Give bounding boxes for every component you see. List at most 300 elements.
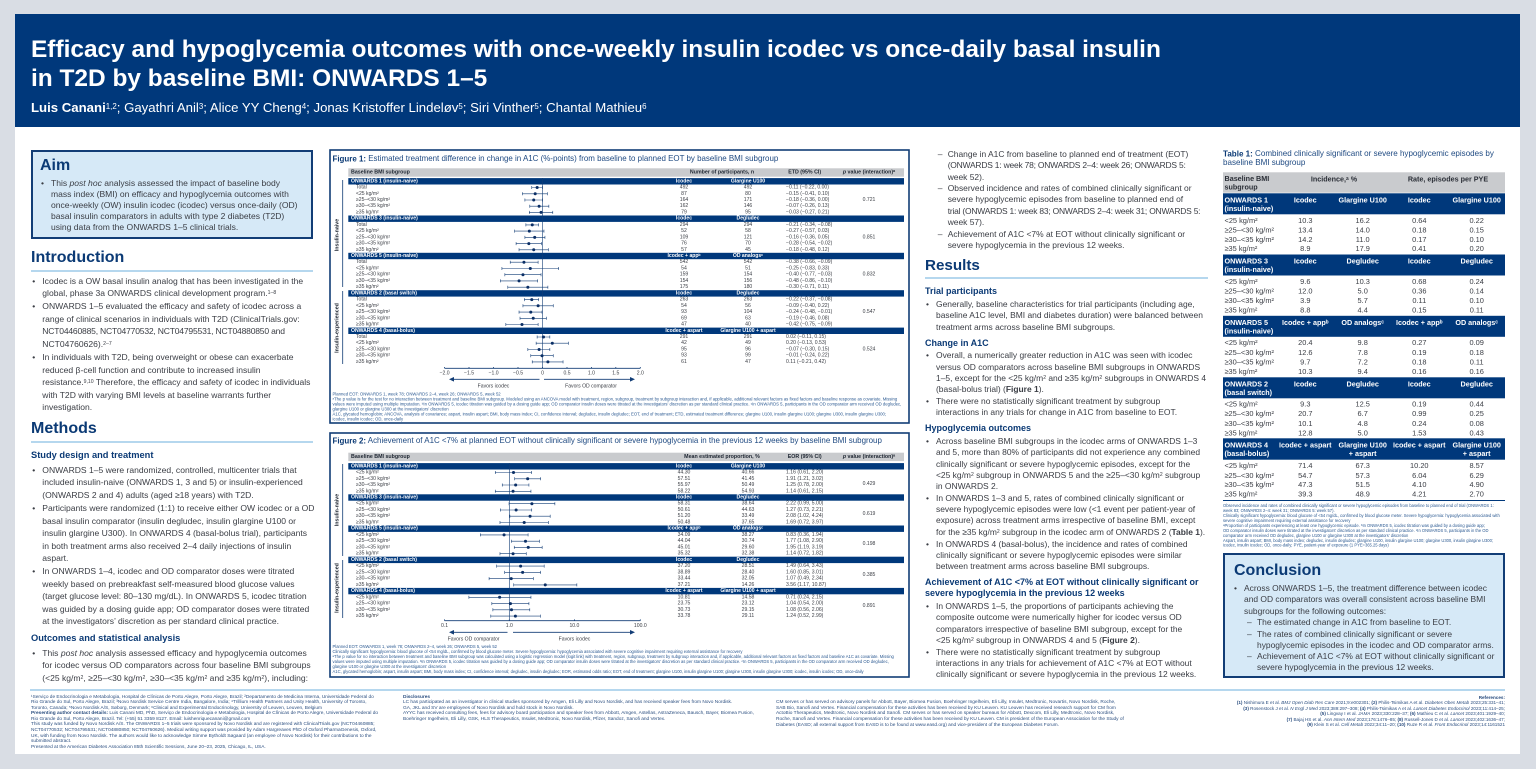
text: study design bullets: included insulin-naive (ONWARDS 1, 3 and 5) or insulin-experienced	[42, 477, 303, 487]
figure 1 footnotes: A1C, glycated hemoglobin; ANCOVA, analysis of covariance; aspart, insulin aspart; BMI, body mass index; CI, confidence interval; degludec, insulin degludec; EOT, end of treatment; ETD, estimated treatment difference; glargine U100, insulin glargine U100; glargine U300, insulin glargine U300;	[332, 412, 886, 416]
ONWARDS 5 block: 0.16	[1412, 367, 1426, 376]
ONWARDS 2 block: 5.0	[1358, 428, 1368, 437]
ONWARDS 4 rows: ≥30–<35 kg/m²	[356, 353, 390, 359]
ONWARDS 4 rows: 1.24 (0.52, 2.99)	[786, 613, 824, 619]
ONWARDS 1 rows: 0.721	[863, 197, 876, 203]
ONWARDS 3 rows: ≥35 kg/m²	[356, 247, 379, 253]
group labels	[334, 464, 343, 618]
ONWARDS 2 block: 0.44	[1470, 400, 1484, 408]
ONWARDS 2 rows	[348, 290, 904, 328]
forest plot 2 markers	[469, 463, 577, 621]
ONWARDS 4 rows: 30.73	[678, 607, 691, 613]
footer: disclosures continued	[776, 700, 1124, 728]
ONWARDS 4 rows: 33.78	[678, 613, 691, 619]
ONWARDS 4 block: ≥30–<35 kg/m²	[1224, 480, 1274, 489]
heading: aim: Aim	[40, 157, 70, 174]
ONWARDS 2 rows: 37.21	[678, 582, 691, 588]
footer: affiliations: Toronto, Canada; ⁵Novo Nordisk A/S, Søborg, Denmark; ⁶Clinical and Experimental Endocrinology, University of Leuven, Leuven, Belgium	[31, 706, 322, 711]
ONWARDS 1 rows: 41.45	[742, 476, 755, 482]
ONWARDS 4 rows: 61	[681, 359, 687, 365]
ONWARDS 3 block: 0.11	[1412, 296, 1426, 305]
figure 2 table header	[348, 453, 904, 461]
ONWARDS 4 rows: 23.12	[742, 601, 755, 607]
ONWARDS 2 rows: −0.42 (−0.75, −0.09)	[786, 322, 833, 328]
ONWARDS 3 rows: ≥30–<35 kg/m²	[356, 513, 390, 519]
ONWARDS 5 block: 7.2	[1358, 358, 1368, 366]
ONWARDS 3 rows: 37.65	[742, 520, 755, 526]
text: trial participants bullet: Generally, baseline characteristics for trial participants (including age,	[936, 299, 1195, 309]
ONWARDS 1 rows: 50.49	[742, 482, 755, 488]
arrow: favors OD comparator: Favors OD comparator	[565, 384, 617, 390]
ONWARDS 1 rows: 1.91 (1.21, 3.02)	[786, 476, 824, 482]
ONWARDS 3 rows: 76	[681, 241, 687, 247]
ONWARDS 1 rows: ≥35 kg/m²	[356, 209, 379, 215]
ONWARDS 4 rows: 0.20 (−0.13, 0.53)	[786, 340, 827, 346]
text: achievement bullets: interactions in any trials for achievement of A1C <7% at EOT without	[936, 658, 1192, 668]
footer: affiliations: This study was funded by Novo Nordisk A/S. The ONWARDS 1–5 trials were sponsored by Novo Nordisk and are registered with ClinicalTrials.gov (NCT04460885;	[31, 722, 375, 727]
ONWARDS 3 rows: Icodec	[676, 216, 692, 222]
ONWARDS 2 rows: 14.26	[742, 582, 755, 588]
ONWARDS 1 rows	[348, 178, 904, 215]
text: study design bullets: In ONWARDS 1–4, icodec and OD comparator doses were titrated	[42, 566, 294, 576]
ONWARDS 1 rows: <25 kg/m²	[356, 191, 379, 197]
heading: methods: Methods	[31, 420, 97, 437]
ONWARDS 2 block: 4.8	[1358, 419, 1368, 428]
ONWARDS 3 block: 12.0	[1298, 286, 1312, 296]
figure 2 title: Figure 2: Achievement of A1C <7% at planned EOT without clinically significant or severe hypoglycemia in the previous 12 weeks by baseline BMI subgroup	[332, 436, 882, 445]
ONWARDS 1 block: 16.2	[1356, 216, 1370, 225]
figure 2 table header: Baseline BMI subgroup	[351, 454, 411, 460]
text: study design bullets: aspart.	[42, 553, 68, 563]
text: aim bullet: once-weekly (OW) insulin icodec (icodec) versus once-daily (OD)	[51, 200, 298, 210]
group labels: Insulin-experienced	[334, 563, 340, 613]
footer: affiliations: UK, with funding from Novo Nordisk. The authors would like to acknowledge Simme Bytholdt Søgaard (an employee of Novo Nordisk) for their contributions to the	[31, 734, 372, 739]
ONWARDS 5 rows: ≥30–<35 kg/m²	[356, 544, 390, 550]
ONWARDS 2 block: Icodec	[1294, 380, 1317, 388]
ONWARDS 1 rows: 40.66	[742, 470, 755, 476]
ONWARDS 4 rows: <25 kg/m²	[356, 594, 379, 600]
ONWARDS 1 rows: <25 kg/m²	[356, 470, 379, 476]
figure 2 footnotes: glargine U100 or glargine U300 at the investigators’ discretion	[332, 664, 447, 669]
ONWARDS 5 rows: 154	[680, 278, 688, 284]
ONWARDS 5 block	[1223, 316, 1505, 376]
ONWARDS 5 block: (insulin-naive)	[1224, 326, 1274, 336]
ONWARDS 4 rows: ≥25–<30 kg/m²	[356, 601, 390, 607]
ONWARDS 5 rows: ONWARDS 5 (insulin-naive)	[351, 253, 418, 259]
ONWARDS 3 rows: 38.64	[742, 501, 755, 507]
ONWARDS 5 rows: 542	[680, 259, 688, 265]
panel: figure 2	[329, 432, 910, 678]
ONWARDS 1 block: Icodec	[1408, 196, 1431, 204]
ONWARDS 1 block: 0.22	[1470, 216, 1484, 225]
ONWARDS 5 block: Icodec + appᵇ	[1396, 318, 1443, 327]
footer: references	[1237, 694, 1505, 727]
ONWARDS 4 rows: 23.75	[678, 601, 691, 607]
ONWARDS 4 block: 8.57	[1470, 461, 1484, 470]
ONWARDS 3 rows: −0.18 (−0.48, 0.12)	[786, 247, 830, 253]
table 1	[1223, 149, 1505, 548]
text: hypoglycemia outcomes bullets: exposure) across treatment arms irrespective of baseline BMI, except	[936, 515, 1195, 525]
ONWARDS 1 rows: 87	[681, 191, 687, 197]
ONWARDS 5 block: 12.6	[1298, 348, 1312, 357]
figure 1 x axis: 0.5	[563, 370, 571, 376]
ONWARDS 5 rows: Total	[356, 259, 367, 265]
ONWARDS 2 rows: 3.56 (1.17, 10.87)	[786, 582, 827, 588]
ONWARDS 3 rows: 294	[744, 222, 752, 228]
text: introduction bullets: investigation.	[42, 402, 92, 412]
ONWARDS 1 rows: 146	[744, 203, 752, 209]
ONWARDS 3 rows: −0.16 (−0.36, 0.05)	[786, 234, 830, 240]
ONWARDS 1 rows: ≥35 kg/m²	[356, 488, 379, 494]
footer: disclosures continued: Diabetes (EASD; all external support from EASD is to be found at www.easd.org) and vice-president of the European Diabetes Forum.	[776, 723, 1059, 728]
ONWARDS 3 rows: −0.28 (−0.54, −0.02)	[786, 241, 833, 247]
text: trial participants bullet: baseline A1C level, BMI and diabetes duration) were balanced between	[936, 310, 1203, 320]
table footnotes: icodec, insulin icodec; OD, once-daily; PYE, patient-year of exposure (1 PYE=365.25 days)	[1223, 543, 1389, 548]
ONWARDS 4 block: 51.5	[1356, 480, 1370, 489]
text: hypoglycemia outcomes bullets: clinically significant or severe hypoglycemic episodes, except for the	[936, 459, 1190, 469]
forest plot 1 markers	[500, 178, 568, 368]
ONWARDS 2 rows: −0.24 (−0.48, −0.01)	[786, 309, 833, 315]
ONWARDS 3 rows: 70	[745, 241, 751, 247]
ONWARDS 2 rows: ≥35 kg/m²	[356, 322, 379, 328]
ONWARDS 3 block: Icodec	[1294, 257, 1317, 266]
ONWARDS 3 block: <25 kg/m²	[1224, 277, 1258, 286]
figure 2 footnotes: A1C, glycated hemoglobin; aspart, insulin aspart; BMI, body mass index; CI, confidence interval; degludec, insulin degludec; EOR, estimated odds ratio; EOT, end of treatment; glargine U100, insulin glargine U100; glargine U300, insulin glargine U300; icodec, insulin icodec; OD, once-daily	[332, 669, 865, 674]
ONWARDS 5 rows: <25 kg/m²	[356, 266, 379, 272]
footer: disclosures: AYYC has received consulting fees, fees for advisory board participation and speaker fees from Abbott, Amgen, Astellas, AstraZeneca, Bausch, Bayer, Biomea Fusion,	[403, 711, 754, 716]
ONWARDS 4 block: Icodec + aspart	[1393, 440, 1446, 450]
figure 1 table header: ETD (95% CI)	[788, 170, 821, 176]
ONWARDS 1 rows: −0.15 (−0.41, 0.10)	[786, 191, 830, 197]
table footnotes: Clinically significant hypoglycemia: blood glucose of <54 mg/dL, confirmed by blood glucose meter. Severe hypoglycemia: hypoglycemia associated with	[1223, 513, 1500, 518]
text: study design bullets: basal insulin comparator (insulin degludec, insulin glargine U100 or	[42, 516, 296, 526]
subheading: outcomes: Outcomes and statistical analysis	[31, 633, 180, 643]
text: hypoglycemia outcomes bullets: clinically significant or severe hypoglycemic episodes were similar	[936, 550, 1182, 560]
ONWARDS 2 rows: Icodec	[676, 557, 692, 563]
ONWARDS 2 rows: −0.22 (−0.37, −0.08)	[786, 297, 833, 303]
ONWARDS 2 rows: 40	[745, 322, 751, 328]
ONWARDS 2 rows: 0.547	[863, 309, 876, 315]
ONWARDS 2 block: ≥25–<30 kg/m²	[1224, 409, 1274, 418]
text: achievement bullets: comparators irrespective of baseline BMI subgroup, except for the	[936, 624, 1182, 634]
ONWARDS 5 block: 9.8	[1358, 338, 1368, 347]
footer: affiliations: ¹Serviço de Endocrinologia e Metabologia, Hospital de Clínicas de Porto Alegre, Porto Alegre, Brazil; ²Departamento de Medicina Interna, Universidade Federal do	[31, 694, 374, 700]
ONWARDS 3 rows: 1.69 (0.72, 3.97)	[786, 520, 824, 526]
ONWARDS 2 rows: Total	[356, 297, 367, 303]
figure 2 footnotes: values were imputed using multiple imputation. ᵇIn ONWARDS 5, icodec titration was guided by a dosing guide app; OD comparator insulin doses were titrated at the investigators’ discretion as per standard clinical practice. ᶜIn ONWARDS 5, participants in the OD comparator arm received OD degludec,	[332, 659, 889, 664]
figure 1 x axis: 1.0	[588, 370, 595, 376]
ONWARDS 5 block: 20.4	[1298, 338, 1312, 347]
ONWARDS 3 rows: 58	[745, 228, 751, 234]
figure 1 table header	[348, 168, 904, 177]
ONWARDS 5 rows: 32.38	[742, 551, 755, 557]
panel: conclusion: severe hypoglycemia in the previous 12 weeks.	[1257, 662, 1434, 672]
text: methods continued dash list: trial (ONWARDS 1: week 83; ONWARDS 2–4: week 31; ONWARDS 5:	[948, 206, 1200, 216]
subheading: achievement: Achievement of A1C <7% at EOT without clinically significant or	[925, 577, 1198, 587]
ONWARDS 2 block: 1.53	[1412, 428, 1426, 437]
figure 1 footnotes: ᵃThe p value is for the test for no interaction between treatment and baseline BMI subgroup. Modeled using an ANCOVA model with treatment, region, subgroup, treatment by subgroup interaction and, if applicable, additional relevant factors as fixed factors and baseline response as covariate. Missing	[332, 396, 898, 402]
ONWARDS 3 rows: 2.22 (0.99, 5.00)	[786, 501, 824, 507]
ONWARDS 2 rows: 263	[744, 297, 752, 303]
ONWARDS 1 block: 0.18	[1412, 226, 1426, 234]
ONWARDS 2 rows: ONWARDS 2 (basal switch)	[351, 290, 417, 296]
ONWARDS 1 block	[1223, 193, 1505, 253]
text: aim bullet	[51, 178, 298, 233]
ONWARDS 2 block: 0.25	[1470, 409, 1484, 418]
title: Efficacy and hypoglycemia outcomes with once-weekly insulin icodec vs once-daily basal insulin	[31, 36, 1161, 63]
group labels: Insulin-naive	[334, 494, 340, 526]
ONWARDS 2 rows: 28.40	[742, 569, 755, 575]
ONWARDS 1 rows: Glargine U100	[731, 463, 765, 469]
figure 1 x axis: 2.0	[637, 370, 644, 376]
ONWARDS 4 block	[1223, 438, 1505, 501]
ONWARDS 3 rows: ≥25–<30 kg/m²	[356, 507, 390, 513]
ONWARDS 2 rows: 0.385	[863, 572, 876, 578]
ONWARDS 5 block: 0.09	[1470, 338, 1484, 347]
text: change in A1C bullets: Overall, a numerically greater reduction in A1C was seen with icodec	[936, 350, 1193, 360]
ONWARDS 5 rows: 51	[745, 266, 751, 272]
ONWARDS 4 block: 71.4	[1298, 461, 1312, 470]
ONWARDS 4 rows: 1.08 (0.56, 2.06)	[786, 607, 824, 613]
footer: disclosures continued: Roche, Sanofi and Vertex. Financial compensation for these activities has been received by KU Leuven. CM is president of the European Association for the Study of	[776, 717, 1124, 722]
ONWARDS 4 rows: ≥35 kg/m²	[356, 613, 379, 619]
table footnotes: Aspart, insulin aspart; BMI, body mass index; degludec, insulin degludec; glargine U100, insulin glargine U100; glargine U300, insulin glargine U300;	[1223, 538, 1493, 543]
text: hypoglycemia outcomes bullets: Across baseline BMI subgroups in the icodec arms of ONWARDS 1–3	[936, 436, 1197, 446]
ONWARDS 3 rows: 0.851	[863, 234, 876, 240]
ONWARDS 3 rows: 294	[680, 222, 688, 228]
ONWARDS 3 rows: 121	[744, 234, 752, 240]
ONWARDS 5 rows: −0.40 (−0.77, −0.03)	[786, 272, 833, 278]
arrow: favors OD comparator: Favors OD comparator	[448, 637, 500, 643]
ONWARDS 5 rows: 30.74	[742, 538, 755, 544]
ONWARDS 2 rows: 37.20	[678, 563, 691, 569]
ONWARDS 4 rows: Total	[356, 334, 367, 340]
figure 1 x axis: −1.5	[464, 370, 474, 376]
ONWARDS 5 rows: −0.48 (−0.86, −0.10)	[786, 278, 833, 284]
panel: conclusion: hypoglycemic episodes in the icodec and OD comparator arms.	[1257, 640, 1494, 650]
ONWARDS 4 block: 6.04	[1412, 471, 1426, 480]
ONWARDS 5 rows: 0.83 (0.36, 1.94)	[786, 532, 824, 538]
ONWARDS 4 rows: ONWARDS 4 (basal-bolus)	[351, 588, 415, 594]
ONWARDS 3 block: ONWARDS 3	[1224, 257, 1268, 266]
ONWARDS 1 block: 0.20	[1470, 244, 1484, 253]
text: methods continued dash list	[938, 149, 1200, 250]
ONWARDS 3 block: ≥30–<35 kg/m²	[1224, 296, 1274, 305]
ONWARDS 3 rows: 58.31	[678, 501, 691, 507]
ONWARDS 1 block: 0.41	[1412, 244, 1426, 253]
text: outcomes bullet	[42, 647, 311, 684]
ONWARDS 5 rows	[348, 253, 904, 290]
footer: disclosures: LC has participated as an investigator in clinical studies sponsored by Amgen, Eli Lilly and Novo Nordisk, and has received speaker fees from Novo Nordisk.	[403, 700, 732, 705]
arrow: favors icodec	[513, 630, 635, 643]
ONWARDS 3 block: 3.9	[1300, 296, 1310, 305]
ONWARDS 1 block: Glargine U100	[1339, 196, 1387, 204]
text: hypoglycemia outcomes bullets: severe hypoglycemic episodes were low (<1 event per patient-year of	[936, 504, 1195, 514]
table header: subgroup	[1224, 182, 1258, 192]
ONWARDS 2 block: ONWARDS 2	[1224, 380, 1268, 388]
text: change in A1C bullets: 1–5, except for the <25 kg/m2 and ≥35 kg/m2 subgroups in ONWARDS 4	[936, 373, 1206, 383]
ONWARDS 1 rows: Icodec	[676, 463, 692, 469]
figure 1 footnotes: icodec, insulin icodec; OD, once-daily	[332, 416, 404, 421]
ONWARDS 5 block: 0.27	[1412, 338, 1426, 347]
text: aim bullet: using data from the ONWARDS 1–5 clinical trials.	[51, 222, 238, 232]
text: introduction bullets: resistance.9,10 Therefore, the efficacy and safety of icodec in individuals	[42, 377, 310, 387]
ONWARDS 4 block: 4.10	[1412, 480, 1426, 489]
ONWARDS 5 rows: 1.14 (0.72, 1.82)	[786, 551, 824, 557]
ONWARDS 5 rows: 0.198	[863, 541, 876, 547]
text: study design bullets: (target glucose level: 80–130 mg/dL). In ONWARDS 5, icodec titration	[42, 591, 307, 601]
arrow: favors icodec	[449, 377, 540, 390]
table footnotes: week 83; ONWARDS 2–4: week 31; ONWARDS 5: week 57).	[1223, 508, 1335, 513]
text: aim bullet: basal insulin comparators in adults with type 2 diabetes (T2D)	[51, 211, 284, 221]
ONWARDS 3 block: Degludec	[1347, 257, 1379, 266]
ONWARDS 4 block: 67.3	[1356, 461, 1370, 470]
ONWARDS 1 rows: 95	[745, 209, 751, 215]
heading: results: Results	[925, 257, 980, 274]
ONWARDS 3 rows: −0.27 (−0.57, 0.03)	[786, 228, 830, 234]
ONWARDS 5 rows: 156	[744, 278, 752, 284]
ONWARDS 2 rows: ≥25–<30 kg/m²	[356, 309, 390, 315]
text: study design bullets	[32, 465, 314, 626]
text: change in A1C bullets	[926, 350, 1206, 417]
ONWARDS 4 rows: 0.11 (−0.21, 0.42)	[786, 359, 826, 365]
ONWARDS 2 rows: <25 kg/m²	[356, 563, 379, 569]
footer: affiliations: Rio Grande do Sul, Porto Alegre, Brazil; ³Novo Nordisk Service Centre India, Bangalore, India; ⁴Trillium Health Partners and Unity Health, University of Toronto,	[31, 700, 367, 705]
figure 1 x axis	[440, 367, 644, 376]
ONWARDS 4 block: Glargine U100	[1453, 440, 1501, 450]
subheading: achievement	[925, 577, 1198, 598]
ONWARDS 2 rows: 28.51	[742, 563, 755, 569]
ONWARDS 4 rows: 96	[745, 346, 751, 352]
ONWARDS 5 rows: Icodec + appᵇ	[668, 253, 700, 259]
ONWARDS 3 block: (insulin-naive)	[1224, 265, 1274, 274]
ONWARDS 3 block: 0.14	[1470, 286, 1484, 296]
text: introduction bullets: reduced β-cell function and contribute to increased insulin	[42, 365, 261, 375]
ONWARDS 3 rows: 2.08 (1.02, 4.24)	[786, 513, 824, 519]
ONWARDS 4 rows: −0.01 (−0.24, 0.22)	[786, 353, 830, 359]
text: outcomes bullet: (<25 kg/m2, ≥25–<30 kg/m2, ≥30–<35 kg/m2 and ≥35 kg/m2), including:	[42, 673, 308, 683]
ONWARDS 3 block	[1223, 254, 1505, 314]
ONWARDS 5 rows: ONWARDS 5 (insulin-naive)	[351, 526, 418, 532]
ONWARDS 5 rows: 1.95 (1.19, 3.19)	[786, 544, 824, 550]
ONWARDS 1 rows: 492	[744, 184, 752, 190]
ONWARDS 5 rows: 159	[680, 272, 688, 278]
ONWARDS 4 block: <25 kg/m²	[1224, 461, 1258, 470]
ONWARDS 5 rows: 38.27	[742, 532, 755, 538]
ONWARDS 5 block: 0.11	[1470, 358, 1484, 366]
ONWARDS 1 rows: 0.429	[863, 481, 876, 487]
ONWARDS 3 rows: ≥35 kg/m²	[356, 520, 379, 526]
arrow: favors icodec: Favors icodec	[559, 637, 591, 643]
ONWARDS 2 rows: <25 kg/m²	[356, 303, 379, 309]
ONWARDS 5 block: Icodec + appᵇ	[1282, 318, 1329, 327]
ONWARDS 4 block: ≥25–<30 kg/m²	[1224, 471, 1274, 480]
text: methods continued dash list: Observed incidence and rates of combined clinically significant or	[948, 183, 1192, 193]
ONWARDS 1 rows: 58.22	[678, 488, 691, 494]
text: introduction bullets: with T2D with varying BMI levels at baseline warrants further	[42, 390, 271, 400]
ONWARDS 1 block: 10.3	[1298, 216, 1312, 225]
ONWARDS 2 rows: −0.09 (−0.40, 0.22)	[786, 303, 830, 309]
ONWARDS 2 block: 12.5	[1356, 400, 1370, 408]
arrow: favors icodec: Favors icodec	[478, 384, 510, 390]
ONWARDS 4 rows: Icodec + aspart	[665, 588, 703, 594]
ONWARDS 3 rows: Icodec	[676, 494, 692, 500]
title: in T2D by baseline BMI: ONWARDS 1–5	[31, 65, 487, 92]
ONWARDS 1 rows: ≥30–<35 kg/m²	[356, 203, 390, 209]
ONWARDS 3 rows: ≥25–<30 kg/m²	[356, 234, 390, 240]
ONWARDS 3 rows: ONWARDS 3 (insulin-naive)	[351, 494, 418, 500]
ONWARDS 3 block: Degludec	[1461, 257, 1493, 266]
figure 1 x axis: 0	[541, 370, 544, 376]
ONWARDS 5 block: <25 kg/m²	[1224, 338, 1258, 347]
figure 2 x axis: 1.0	[506, 623, 513, 629]
ONWARDS 2 block: 0.43	[1470, 428, 1484, 437]
ONWARDS 5 block: 0.19	[1412, 348, 1426, 357]
ONWARDS 4 rows: <25 kg/m²	[356, 340, 379, 346]
text: methods continued dash list: severe hypoglycemia in the previous 12 weeks.	[948, 240, 1125, 250]
ONWARDS 5 rows: Icodec + appᵇ	[668, 526, 700, 532]
text: conclusion bullets	[1244, 583, 1487, 617]
ONWARDS 5 rows: OD analogsᶜ	[733, 526, 763, 532]
panel: conclusion: The estimated change in A1C from baseline to EOT.	[1257, 617, 1451, 627]
ONWARDS 2 block: 0.08	[1470, 419, 1484, 428]
ONWARDS 3 block: 9.6	[1300, 277, 1310, 286]
ONWARDS 4 block: 39.3	[1298, 490, 1312, 499]
ONWARDS 4 rows	[348, 588, 904, 619]
panel: conclusion: Achievement of A1C <7% at EOT without clinically significant or	[1257, 651, 1494, 661]
text: hypoglycemia outcomes bullets: In ONWARDS 1–3 and 5, rates of combined clinically significant or	[936, 493, 1184, 503]
ONWARDS 2 rows: ONWARDS 2 (basal switch)	[351, 557, 417, 563]
ONWARDS 2 rows: 263	[680, 297, 688, 303]
ONWARDS 5 rows: −0.30 (−0.71, 0.11)	[786, 284, 829, 290]
panel: conclusion	[1223, 553, 1505, 678]
ONWARDS 3 rows: Degludec	[737, 494, 760, 500]
text: introduction bullets: NCT04460885, NCT04770532, NCT04795531, NCT04880850 and	[42, 326, 285, 336]
ONWARDS 4 rows: ≥35 kg/m²	[356, 359, 379, 365]
ONWARDS 2 block: 20.7	[1298, 409, 1312, 418]
ONWARDS 2 rows: 38.89	[678, 569, 691, 575]
ONWARDS 2 rows: ≥30–<35 kg/m²	[356, 576, 390, 582]
ONWARDS 1 rows: 1.16 (0.61, 2.20)	[786, 470, 824, 476]
ONWARDS 5 block: ≥35 kg/m²	[1224, 367, 1258, 376]
ONWARDS 1 block: (insulin-naive)	[1224, 204, 1274, 213]
ONWARDS 4 block: ONWARDS 4	[1224, 440, 1268, 450]
ONWARDS 2 block: 0.19	[1412, 400, 1426, 408]
ONWARDS 3 rows: <25 kg/m²	[356, 228, 379, 234]
ONWARDS 1 block: 0.17	[1412, 235, 1426, 244]
text: study design bullets: was guided by a dosing guide app; OD comparator doses were titrated	[42, 604, 309, 614]
text: hypoglycemia outcomes bullets	[926, 436, 1205, 571]
ONWARDS 5 rows: 45.01	[678, 544, 691, 550]
ONWARDS 4 rows	[348, 328, 904, 365]
ONWARDS 5 rows: −0.25 (−0.83, 0.33)	[786, 266, 830, 272]
text: methods continued dash list: Achievement of A1C <7% at EOT without clinically significant or	[948, 229, 1185, 239]
ONWARDS 1 rows: 1.14 (0.61, 2.15)	[786, 488, 824, 494]
title	[31, 36, 1161, 92]
ONWARDS 1 rows: 1.25 (0.78, 2.00)	[786, 482, 824, 488]
ONWARDS 3 block: Icodec	[1408, 257, 1431, 266]
ONWARDS 2 rows: 1.49 (0.64, 3.43)	[786, 563, 824, 569]
figure 2 footnotes: Planned EOT: ONWARDS 1, week 78; ONWARDS 2–4, week 26; ONWARDS 5, week 52	[332, 644, 498, 649]
text: study design bullets: weekly based on prebreakfast self-measured blood glucose values	[42, 579, 295, 589]
ONWARDS 2 rows: Degludec	[737, 290, 760, 296]
ONWARDS 1 rows: Icodec	[676, 178, 692, 184]
ONWARDS 4 rows: 0.02 (−0.11, 0.15)	[786, 334, 826, 340]
ONWARDS 4 rows: 95	[681, 346, 687, 352]
text: conclusion bullets: and OD comparators was overall consistent across baseline BMI	[1244, 594, 1486, 604]
footer: disclosures: Disclosures	[403, 694, 430, 700]
text: outcomes bullet: This post hoc analysis assessed efficacy and hypoglycemia outcomes	[42, 648, 307, 658]
